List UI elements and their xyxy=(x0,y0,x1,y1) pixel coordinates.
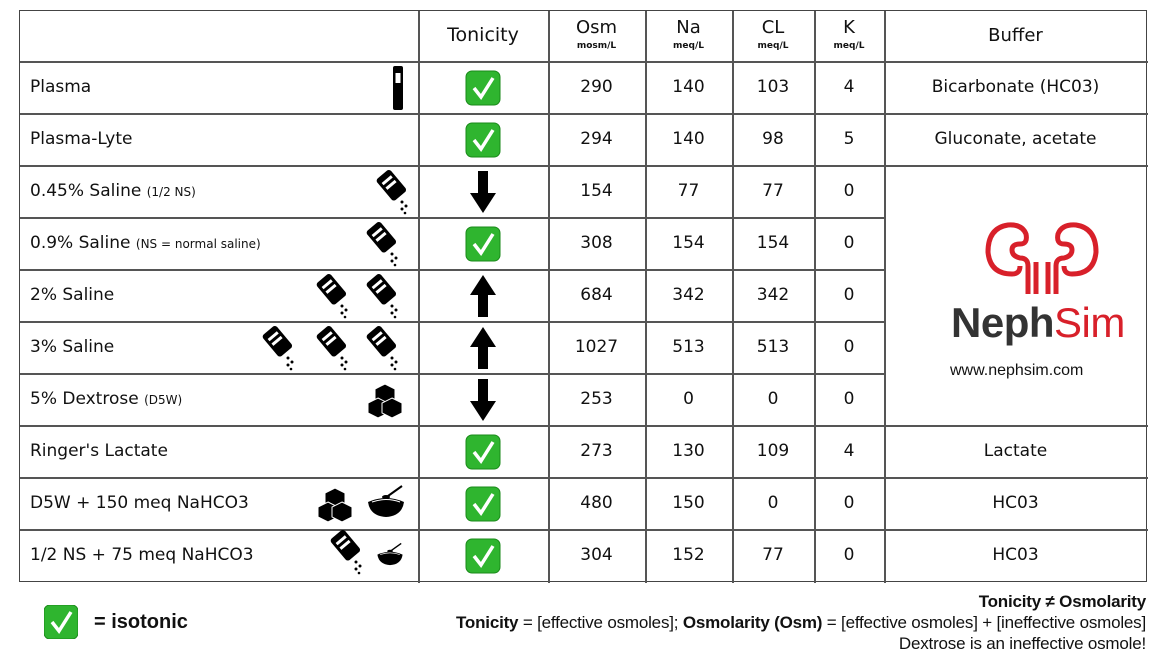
text: CL xyxy=(762,17,784,38)
legend: isotonic: = isotonic xyxy=(94,611,188,633)
text: 150 xyxy=(672,493,705,513)
text: 0 xyxy=(844,493,854,513)
text: 0.45% Saline (1/2 NS) xyxy=(30,181,196,201)
text: 0 xyxy=(768,389,778,409)
icon: kidneys xyxy=(986,222,1098,294)
text: 140 xyxy=(672,77,705,97)
text: mosm/L xyxy=(577,41,616,51)
text: 0 xyxy=(844,181,854,201)
footnote: Tonicity = [effective osmoles]; Osmolarity (Osm) = [effective osmoles] + [ineffective osmoles] xyxy=(456,613,1146,632)
text: Tonicity xyxy=(447,24,519,46)
text: 4 xyxy=(844,441,854,461)
text: 109 xyxy=(757,441,789,461)
text: 684 xyxy=(580,285,613,305)
text: 0 xyxy=(844,285,854,305)
text: 0 xyxy=(768,493,778,513)
text: 140 xyxy=(672,129,705,149)
text: 253 xyxy=(580,389,613,409)
text: 0 xyxy=(844,233,854,253)
text: 480 xyxy=(580,493,613,513)
footnote xyxy=(456,592,1146,653)
text: Bicarbonate (HC03) xyxy=(932,77,1099,97)
row labels xyxy=(30,77,261,565)
text: 77 xyxy=(762,545,784,565)
logo text: NephSim xyxy=(951,299,1125,346)
text: 0 xyxy=(683,389,694,409)
text: 3% Saline xyxy=(30,337,114,357)
text: 0 xyxy=(844,337,854,357)
text: meq/L xyxy=(834,41,864,51)
footnote: Dextrose is an ineffective osmole! xyxy=(899,634,1146,653)
text: 290 xyxy=(580,77,613,97)
text: 154 xyxy=(757,233,789,253)
text: 273 xyxy=(580,441,613,461)
legend: isotonic xyxy=(44,605,188,639)
numeric values xyxy=(575,77,854,565)
text: 0 xyxy=(844,545,854,565)
text: 294 xyxy=(580,129,613,149)
footnote: Tonicity ≠ Osmolarity xyxy=(979,592,1146,611)
text: Osm xyxy=(576,17,617,38)
text: 342 xyxy=(757,285,789,305)
text: Gluconate, acetate xyxy=(934,129,1096,149)
text: meq/L xyxy=(758,41,788,51)
text: 4 xyxy=(844,77,854,97)
text: 308 xyxy=(580,233,613,253)
text: 304 xyxy=(580,545,613,565)
text: Plasma xyxy=(30,77,91,97)
row icons xyxy=(262,66,408,574)
text: 154 xyxy=(580,181,613,201)
text: 77 xyxy=(678,181,699,201)
text: 103 xyxy=(757,77,789,97)
text: Plasma-Lyte xyxy=(30,129,132,149)
buffer column xyxy=(932,77,1099,565)
text: 0 xyxy=(844,389,854,409)
text: Na xyxy=(676,17,701,38)
text: 130 xyxy=(672,441,705,461)
text: 154 xyxy=(672,233,705,253)
url: www.nephsim.com xyxy=(950,362,1083,379)
text: 5 xyxy=(844,129,854,149)
header row xyxy=(447,17,1043,51)
NephSim logo xyxy=(950,222,1125,379)
text: 2% Saline xyxy=(30,285,114,305)
text: 1/2 NS + 75 meq NaHCO3 xyxy=(30,545,254,565)
text: 1027 xyxy=(575,337,618,357)
text: 0.9% Saline (NS = normal saline) xyxy=(30,233,261,253)
text: 152 xyxy=(672,545,705,565)
text: 513 xyxy=(672,337,705,357)
text: D5W + 150 meq NaHCO3 xyxy=(30,493,249,513)
text: 342 xyxy=(672,285,705,305)
text: HC03 xyxy=(992,493,1039,513)
text: HC03 xyxy=(992,545,1039,565)
tonicity icons xyxy=(466,70,500,574)
text: 5% Dextrose (D5W) xyxy=(30,389,182,409)
text: K xyxy=(843,17,855,38)
text: Lactate xyxy=(984,441,1047,461)
text: 77 xyxy=(762,181,784,201)
text: 513 xyxy=(757,337,789,357)
text: 98 xyxy=(762,129,784,149)
text: Ringer's Lactate xyxy=(30,441,168,461)
text: Buffer xyxy=(988,25,1043,46)
text: meq/L xyxy=(673,41,704,51)
